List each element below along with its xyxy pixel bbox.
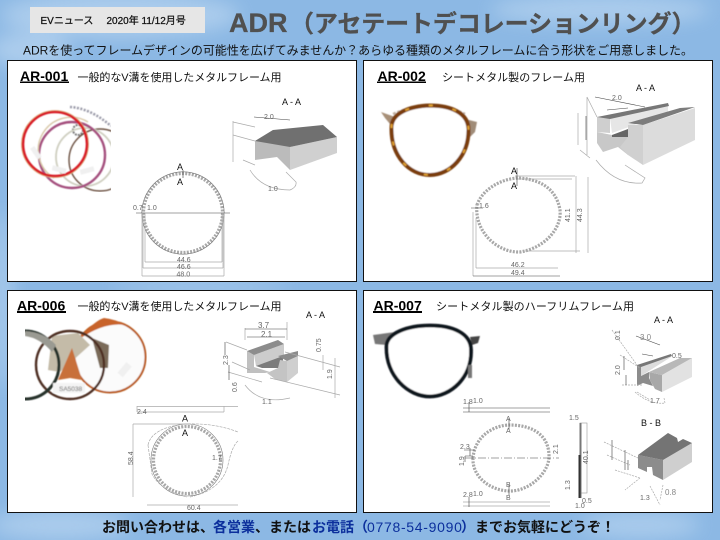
section drawing A-A: 3.0 bbox=[640, 333, 652, 342]
section drawing A-A: 1.7 bbox=[650, 398, 660, 405]
photo: metal frame rings bbox=[20, 105, 111, 192]
lens outline drawing: 1.5 bbox=[569, 415, 579, 422]
ring outline drawing: A bbox=[511, 181, 517, 191]
section drawing A-A: 2.0 bbox=[612, 95, 622, 102]
AR-006 heading bbox=[17, 298, 282, 314]
lens outline drawing: 1.0 bbox=[473, 491, 483, 498]
photo: plastic frame rings bbox=[25, 317, 147, 401]
section drawing A-A: 1.0 bbox=[268, 186, 278, 193]
section drawing A-A: 1.9 bbox=[327, 369, 334, 379]
footer contact line: までお気軽にどうぞ！ bbox=[475, 519, 615, 535]
frame outline drawing: A bbox=[182, 428, 188, 438]
AR-002 heading: シートメタル製のフレーム用 bbox=[442, 70, 585, 84]
AR-007 heading: シートメタル製のハーフリムフレーム用 bbox=[436, 299, 634, 313]
ring outline drawing: A bbox=[177, 177, 183, 187]
footer contact line: ） bbox=[461, 519, 475, 535]
ring outline drawing: 49.4 bbox=[511, 270, 525, 277]
frame outline drawing: A bbox=[182, 414, 188, 424]
section drawing A-A: 0.1 bbox=[615, 330, 622, 340]
AR-006 heading: AR-006 bbox=[17, 298, 65, 314]
lens outline drawing: 2.1 bbox=[553, 444, 560, 454]
photo: plastic frame rings: SA5038 bbox=[59, 386, 83, 393]
section drawing A-A: 0.75 bbox=[316, 338, 323, 352]
lens outline drawing: A bbox=[506, 428, 511, 435]
section drawing A-A: 0.6 bbox=[232, 382, 239, 392]
ring outline drawing: 46.2 bbox=[511, 262, 525, 269]
photo: black half-rim glasses bbox=[373, 326, 480, 396]
section drawing A-A: 0.5 bbox=[672, 353, 682, 360]
section drawing A-A bbox=[578, 83, 695, 183]
section drawing A-A: 3.7 bbox=[258, 321, 270, 330]
section drawing B-B: 1.3 bbox=[640, 495, 650, 502]
lens outline drawing: B bbox=[506, 482, 511, 489]
lens outline drawing bbox=[459, 398, 592, 510]
lens outline drawing: 40.1 bbox=[583, 450, 590, 464]
footer contact line: お電話 bbox=[312, 519, 354, 535]
AR-001 heading bbox=[20, 68, 282, 84]
lens outline drawing: A bbox=[506, 416, 511, 423]
panel: AR-006 bbox=[0, 290, 356, 512]
AR-002 heading: AR-002 bbox=[378, 68, 426, 84]
footer contact line: （ bbox=[354, 519, 368, 535]
frame outline drawing: 2.4 bbox=[137, 409, 147, 416]
lens outline drawing: 1.0 bbox=[473, 398, 483, 405]
ring outline drawing: 0.7 bbox=[133, 205, 143, 212]
lens outline drawing: 1.0 bbox=[575, 503, 585, 510]
news issue tag: 2020年 11/12月号 bbox=[106, 14, 186, 27]
section drawing A-A: A - A bbox=[306, 310, 325, 320]
lens outline drawing: 1.3 bbox=[565, 480, 572, 490]
section drawing A-A: 2.1 bbox=[261, 330, 273, 339]
ring outline drawing: A bbox=[177, 162, 183, 172]
section drawing A-A: 2.0 bbox=[264, 114, 274, 121]
ring outline drawing: 48.0 bbox=[176, 272, 190, 278]
frame outline drawing bbox=[128, 406, 238, 512]
frame outline drawing: 1.7 bbox=[212, 455, 222, 462]
subtitle text: ADRを使ってフレームデザインの可能性を広げてみませんか？あらゆる種類のメタルフレームに合う形状をご用意しました。 bbox=[23, 42, 693, 58]
lens outline drawing: 2.8 bbox=[463, 492, 473, 499]
ring outline drawing: 46.6 bbox=[177, 264, 191, 271]
ring outline drawing: 44.6 bbox=[177, 257, 191, 264]
lens outline drawing: 0.5 bbox=[582, 498, 592, 505]
AR-007 heading bbox=[373, 298, 634, 314]
footer contact line: 0778-54-9090 bbox=[367, 519, 463, 535]
section drawing A-A: 1.1 bbox=[262, 399, 272, 406]
section drawing A-A: A - A bbox=[654, 315, 673, 325]
news issue tag bbox=[30, 7, 205, 33]
lens outline drawing: 1.9 bbox=[459, 456, 466, 466]
section drawing A-A: A - A bbox=[282, 97, 301, 107]
AR-006 heading: 一般的なV溝を使用したメタルフレーム用 bbox=[78, 299, 282, 313]
section drawing B-B: B - B bbox=[641, 418, 661, 428]
ring outline drawing: 1.6 bbox=[479, 203, 489, 210]
footer contact line: 、または bbox=[255, 519, 311, 535]
lens outline drawing: 2.3 bbox=[460, 444, 470, 451]
AR-002 heading bbox=[377, 68, 585, 84]
title: ADR bbox=[229, 8, 288, 38]
news issue tag: EVニュース bbox=[40, 16, 93, 27]
AR-007 heading: AR-007 bbox=[374, 298, 422, 314]
panel: AR-001 bbox=[8, 60, 356, 282]
frame outline drawing: 58.4 bbox=[128, 451, 135, 465]
lens outline drawing: 1.8 bbox=[463, 399, 473, 406]
section drawing A-A: 2.0 bbox=[615, 365, 622, 375]
footer contact line bbox=[102, 519, 615, 535]
AR-001 heading: AR-001 bbox=[20, 68, 68, 84]
section drawing A-A bbox=[612, 315, 692, 405]
panel: AR-007 bbox=[364, 290, 712, 512]
ring outline drawing: A bbox=[511, 166, 517, 176]
panel: AR-002 bbox=[364, 60, 712, 282]
section drawing A-A bbox=[233, 97, 337, 193]
ring outline drawing: 44.3 bbox=[577, 208, 584, 222]
AR-001 heading: 一般的なV溝を使用したメタルフレーム用 bbox=[78, 70, 282, 84]
title: （アセテートデコレーションリング） bbox=[290, 10, 695, 38]
section drawing A-A bbox=[223, 310, 340, 406]
section drawing B-B: 0.8 bbox=[665, 488, 677, 497]
ring outline drawing: 1.0 bbox=[147, 205, 157, 212]
ring outline drawing: 41.1 bbox=[565, 208, 572, 222]
photo: tortoise frame glasses bbox=[381, 106, 477, 175]
section drawing A-A: 2.3 bbox=[223, 355, 230, 365]
section drawing B-B bbox=[604, 418, 692, 505]
footer contact line: 各営業 bbox=[213, 519, 255, 535]
section drawing A-A: A - A bbox=[636, 83, 655, 93]
frame outline drawing: 60.4 bbox=[187, 505, 201, 512]
ring outline drawing bbox=[471, 166, 588, 277]
footer contact line: お問い合わせは、 bbox=[102, 519, 214, 535]
ring outline drawing bbox=[133, 162, 230, 278]
lens outline drawing: B bbox=[506, 495, 511, 502]
